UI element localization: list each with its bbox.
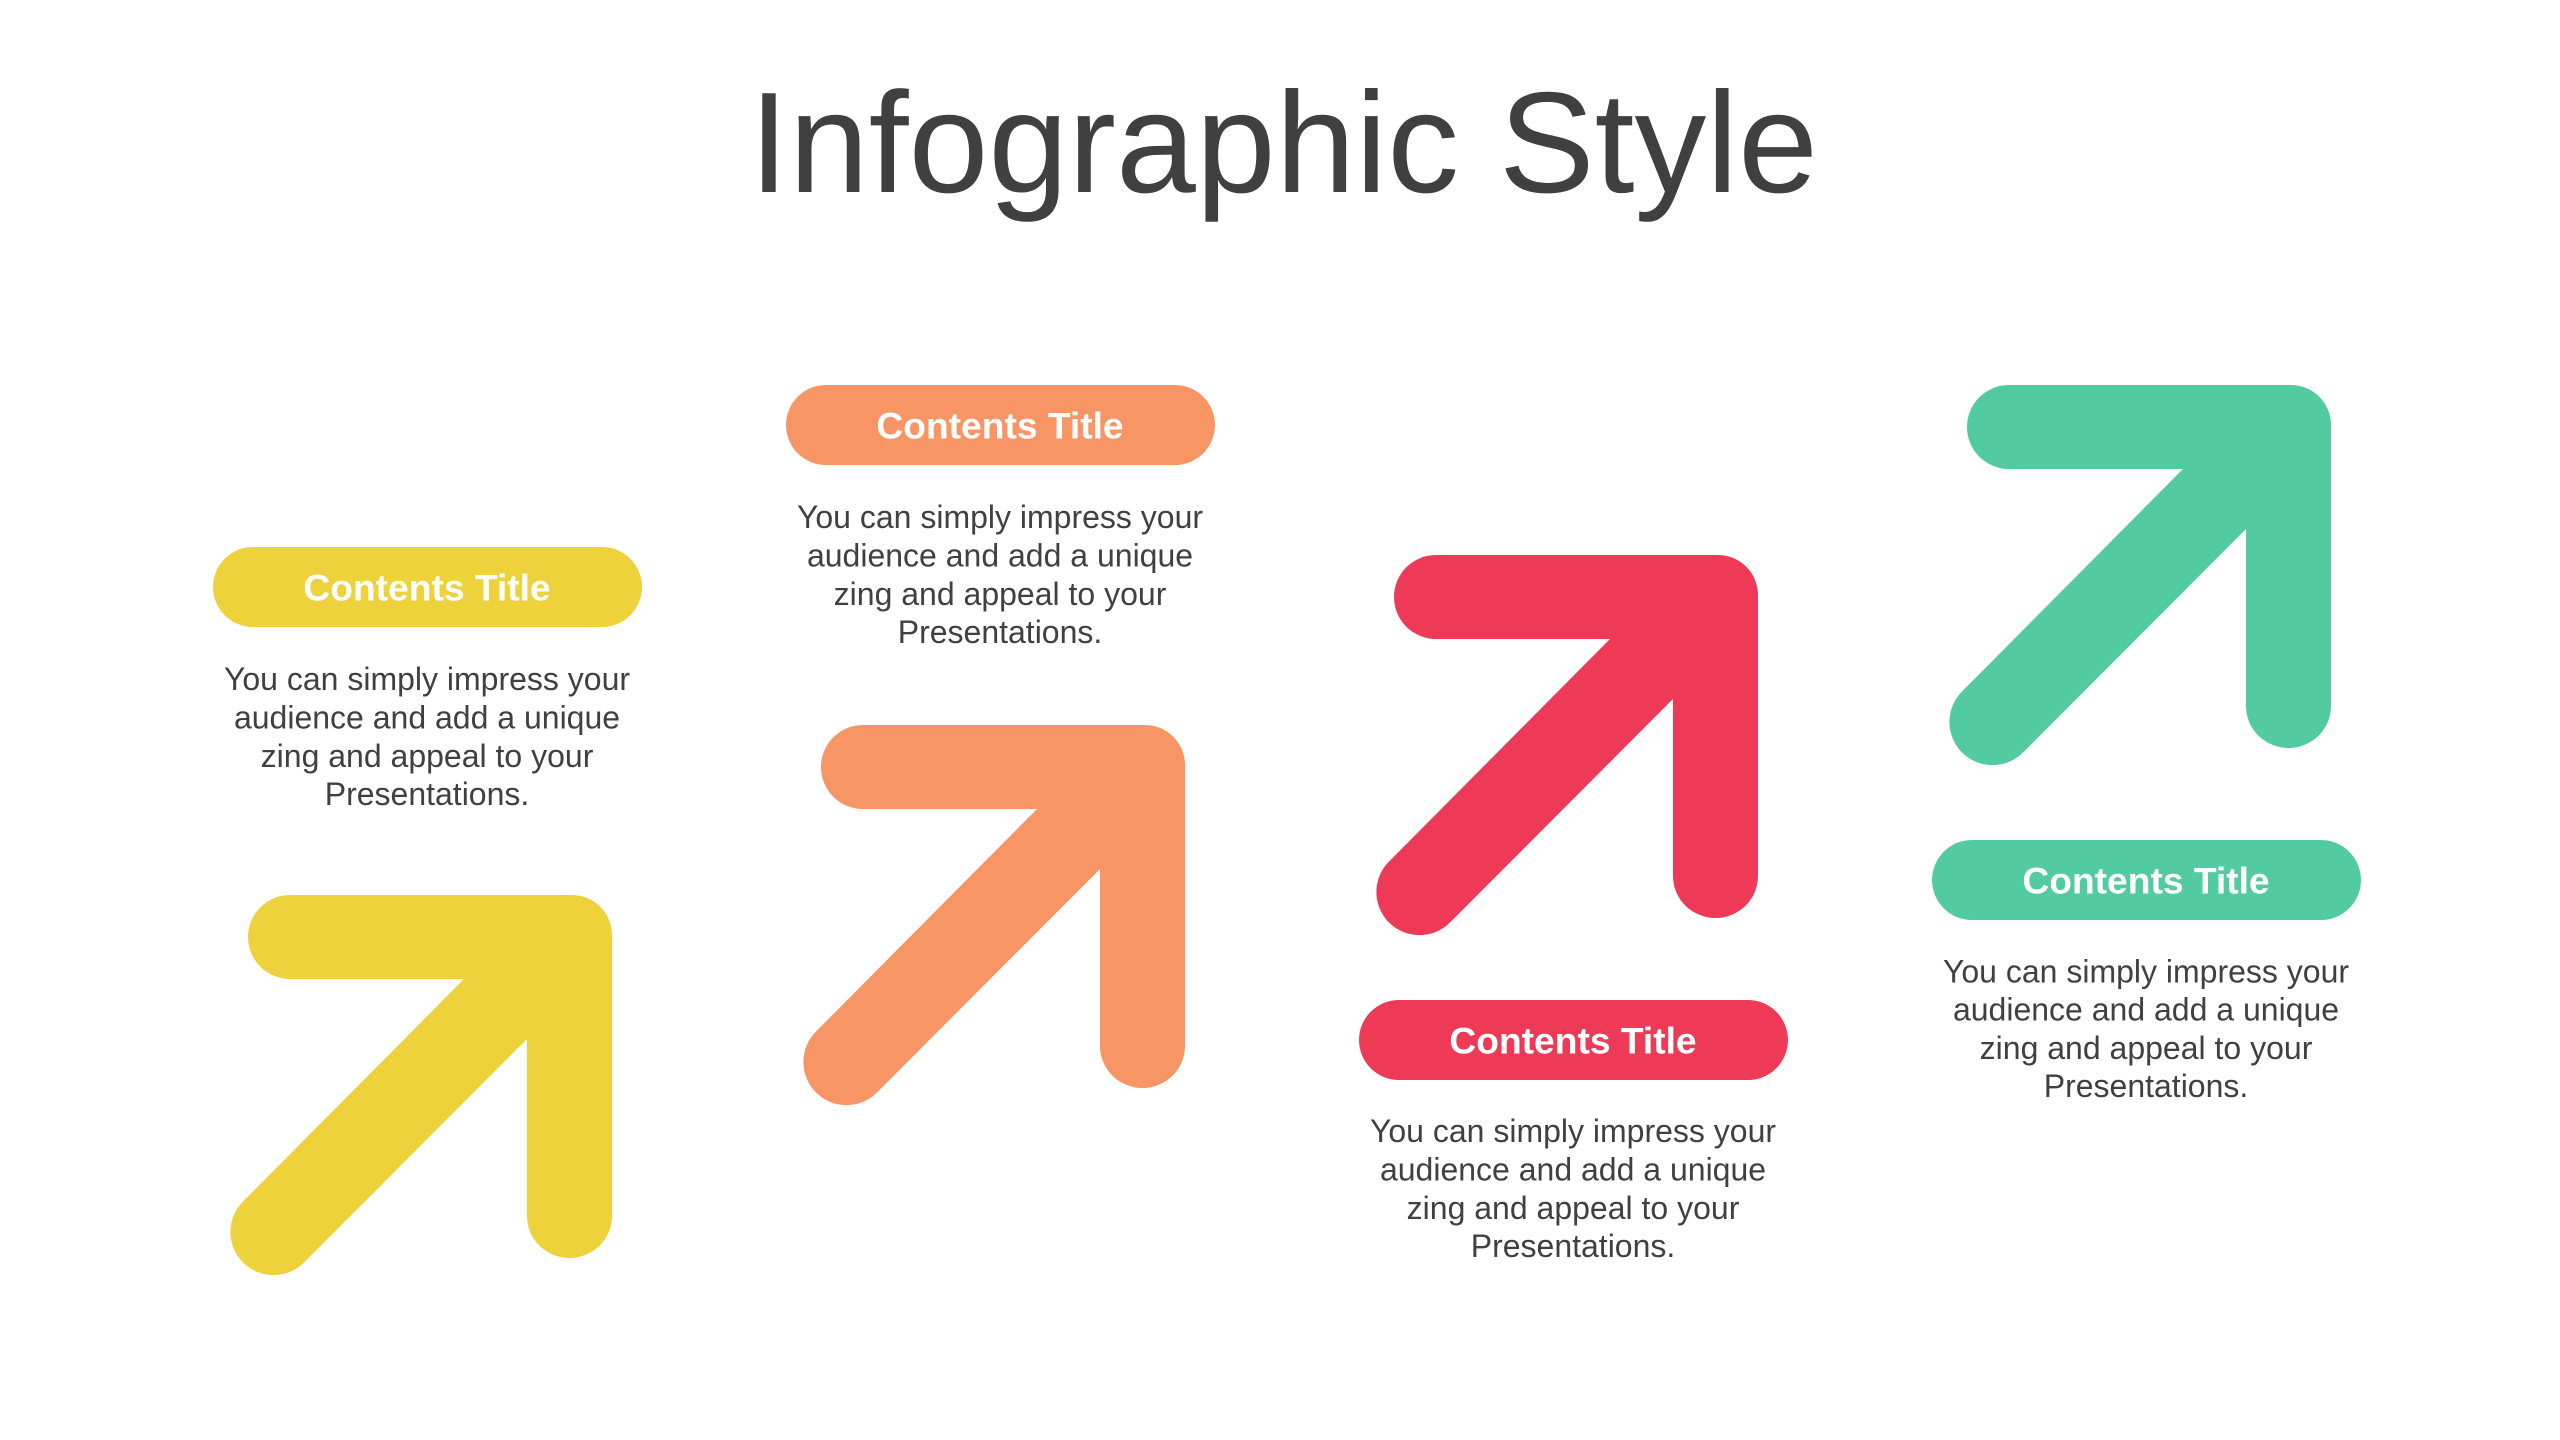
text block: yellow: audience and add a unique — [234, 700, 620, 736]
label pill: green — [1932, 840, 2361, 920]
label pill: yellow: Contents Title — [303, 566, 551, 608]
text block: orange — [797, 499, 1203, 650]
text block: green: Presentations. — [2044, 1068, 2248, 1104]
text block: red: You can simply impress your — [1370, 1113, 1776, 1149]
icon: yellow arrow — [230, 895, 612, 1275]
text block: yellow: Presentations. — [325, 776, 529, 812]
panel: column 1 yellow — [213, 547, 642, 1275]
text block: orange: zing and appeal to your — [834, 576, 1167, 612]
text block: orange: audience and add a unique — [807, 538, 1193, 574]
text block: yellow: zing and appeal to your — [261, 738, 594, 774]
title: Infographic Style — [749, 63, 1818, 223]
text block: orange: You can simply impress your — [797, 499, 1203, 535]
panel: column 4 green — [1932, 385, 2361, 1104]
text block: yellow — [224, 661, 630, 812]
icon: red arrow — [1376, 555, 1758, 935]
text block: orange: Presentations. — [898, 614, 1102, 650]
label pill: orange — [786, 385, 1215, 465]
label pill: red: Contents Title — [1449, 1020, 1697, 1062]
text block: green: You can simply impress your — [1943, 954, 2349, 990]
panel: column 3 red — [1359, 555, 1788, 1264]
label pill: red — [1359, 1000, 1788, 1080]
text block: yellow: You can simply impress your — [224, 661, 630, 697]
icon: green arrow — [1949, 385, 2331, 765]
icon: orange arrow — [803, 725, 1185, 1105]
panel: column 2 orange — [786, 385, 1215, 1105]
text block: red: audience and add a unique — [1380, 1152, 1766, 1188]
text block: green: audience and add a unique — [1953, 992, 2339, 1028]
label pill: orange: Contents Title — [876, 404, 1124, 446]
label pill: green: Contents Title — [2022, 860, 2270, 902]
text block: red: Presentations. — [1471, 1228, 1675, 1264]
text block: red — [1370, 1113, 1776, 1264]
text block: green — [1943, 954, 2349, 1104]
text block: green: zing and appeal to your — [1980, 1030, 2313, 1066]
label pill: yellow — [213, 547, 642, 627]
text block: red: zing and appeal to your — [1407, 1190, 1740, 1226]
